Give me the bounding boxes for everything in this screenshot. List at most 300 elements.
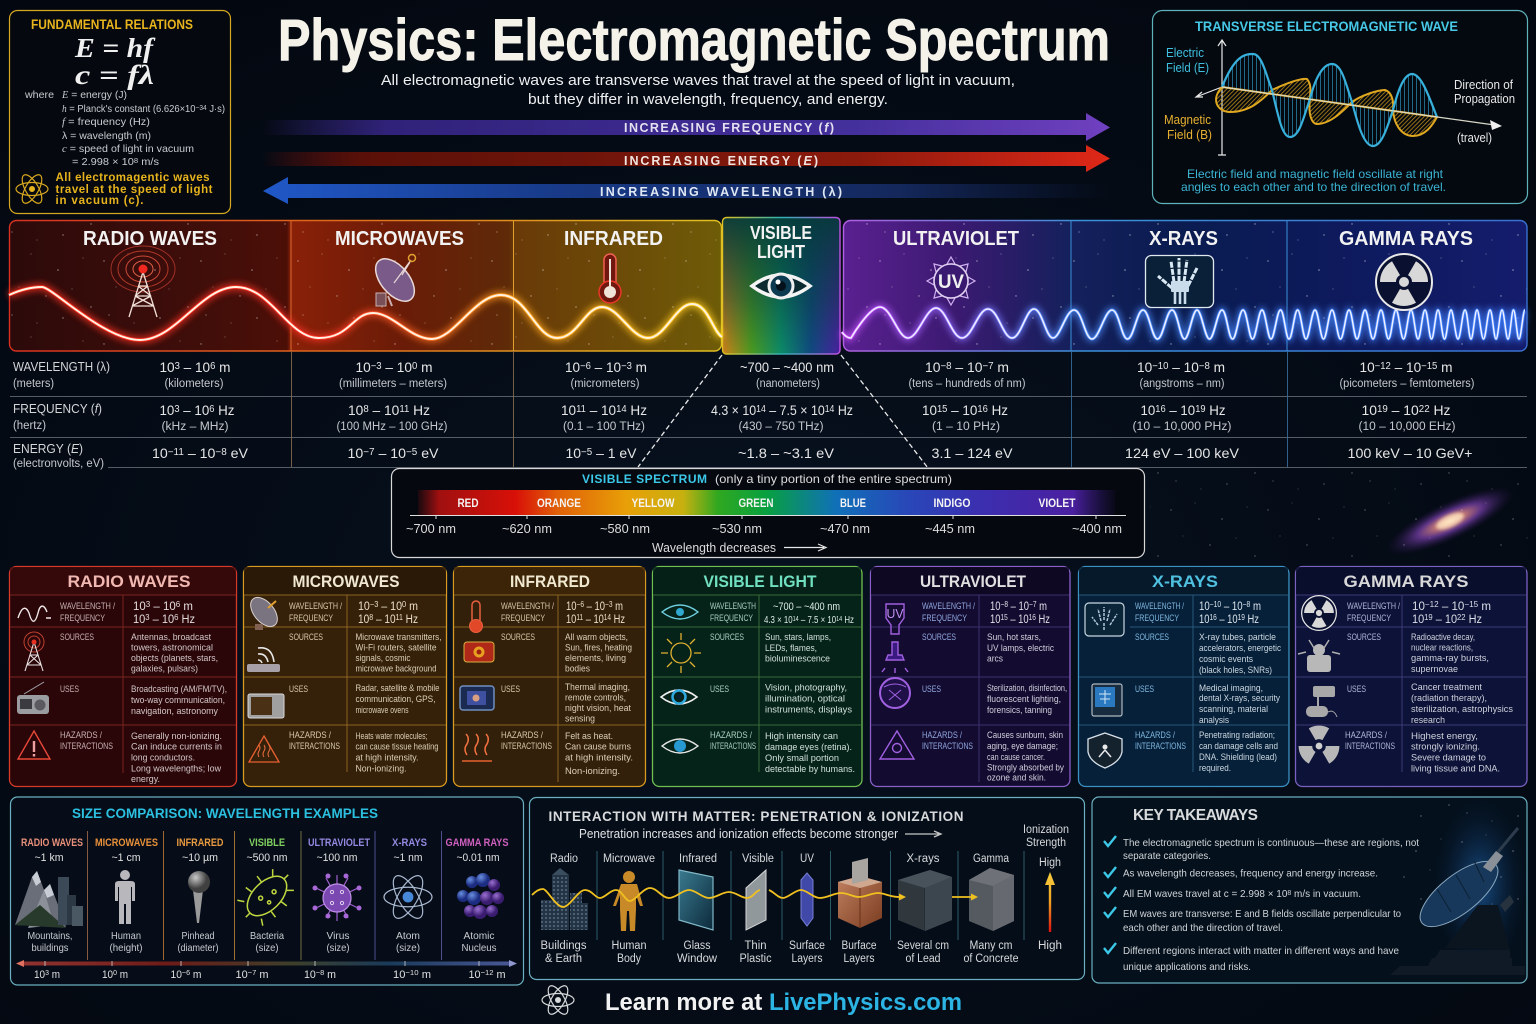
details — [987, 632, 1067, 784]
details: forensics, tanning — [987, 705, 1052, 716]
gamma values: (picometers – femtometers) — [1340, 378, 1475, 390]
x-ray values — [1125, 359, 1240, 461]
details: illumination, optical — [765, 694, 845, 704]
values: 1011 – 1014 Hz — [566, 613, 625, 626]
details: towers, astronomical — [131, 642, 213, 654]
takeaway list: All EM waves travel at c = 2.998 × 108 m/s in vacuum. — [1123, 888, 1361, 900]
details: Non-ionizing. — [356, 764, 406, 774]
card title: GAMMA RAYS — [1344, 572, 1468, 591]
details: Thermal imaging, — [565, 682, 630, 693]
details: Wi-Fi routers, satellite — [356, 642, 436, 654]
card: x-rays — [1078, 566, 1289, 786]
labels: HAZARDS / — [289, 730, 331, 740]
values: 108 – 1011 Hz — [358, 613, 418, 626]
wavelength scale: ~700 nm — [406, 522, 456, 536]
size values — [34, 852, 500, 864]
details: supernovae — [1411, 664, 1458, 675]
radio values: 103 – 106 Hz — [160, 402, 234, 418]
band headings: MICROWAVES — [335, 228, 464, 250]
card title: MICROWAVES — [292, 572, 400, 591]
microwave values: 10−3 – 100 m — [356, 359, 432, 375]
object labels: (diameter) — [178, 942, 218, 954]
labels: USES — [1347, 684, 1366, 694]
icon: x-ray hand — [1146, 256, 1214, 308]
arrow: increasing frequency — [262, 113, 1110, 141]
details: All warm objects, — [565, 632, 628, 643]
scale axis: 10−10 m — [393, 968, 431, 981]
details: Can induce currents in — [131, 742, 222, 752]
details: Medical imaging, — [1199, 683, 1263, 694]
band headings — [83, 223, 1473, 262]
details: at high intensity. — [565, 752, 633, 764]
details: objects (planets, stars, — [131, 653, 218, 664]
details: scanning, material — [1199, 704, 1268, 715]
icon: bacteria — [231, 860, 303, 932]
material labels: Several cm — [897, 940, 949, 952]
band: visible light — [722, 218, 840, 354]
callout: speed of light: travel at the speed of light — [56, 184, 213, 196]
row labels: (electronvolts, eV) — [13, 458, 104, 470]
labels — [1345, 601, 1400, 751]
dashed zoom lines — [638, 355, 928, 468]
labels: FREQUENCY — [922, 613, 967, 623]
material labels: Human — [612, 940, 646, 952]
x-ray values: (10 – 10,000 PHz) — [1132, 421, 1232, 433]
labels: USES — [710, 684, 729, 694]
object: concrete block — [969, 868, 1014, 931]
takeaway list — [1123, 837, 1419, 973]
labels — [60, 601, 115, 751]
labels: USES — [1135, 684, 1154, 694]
object labels: (size) — [326, 942, 350, 954]
column labels: Visible — [742, 853, 774, 865]
visible values: 4.3 × 1014 – 7.5 × 1014 Hz — [711, 402, 853, 418]
card title: RADIO WAVES — [68, 572, 190, 591]
details: sensing — [565, 714, 595, 724]
column labels: Infrared — [679, 853, 717, 865]
material labels: Layers — [844, 953, 875, 965]
material labels: Buildings — [540, 940, 587, 952]
card: ultraviolet — [870, 566, 1070, 786]
material labels: Plastic — [740, 953, 772, 965]
scale axis: 10−8 m — [304, 968, 336, 981]
details: communication, GPS, — [356, 694, 436, 705]
row labels: (meters) — [13, 378, 54, 390]
details: microwave ovens — [356, 705, 409, 716]
object labels: Pinhead — [182, 930, 215, 942]
labels: FREQUENCY — [1135, 613, 1179, 623]
column headings: GAMMA RAYS — [446, 837, 508, 849]
material labels: Many cm — [970, 940, 1012, 952]
details: damage eyes (retina). — [765, 742, 852, 753]
material labels — [540, 940, 1018, 965]
takeaway list: EM waves are transverse: E and B fields oscillate perpendicular to — [1123, 908, 1401, 920]
arrow: increasing energy: INCREASING ENERGY (E) — [624, 154, 818, 168]
values: 10−6 – 10−3 m — [566, 600, 623, 613]
values: 1015 – 1016 Hz — [990, 613, 1050, 626]
labels: fields and direction: (travel) — [1457, 131, 1492, 145]
details — [356, 632, 442, 774]
radio values: (kHz – MHz) — [162, 421, 229, 433]
labels — [501, 601, 554, 751]
column headings: VISIBLE — [249, 837, 285, 849]
labels: USES — [922, 684, 941, 694]
labels: INTERACTIONS — [1135, 741, 1186, 751]
details: Non-ionizing. — [565, 766, 620, 777]
details: cosmic events — [1199, 654, 1253, 665]
colour names: INDIGO — [934, 498, 971, 510]
heading: interaction with matter: INTERACTION WITH MATTER: PENETRATION & IONIZATION — [548, 809, 964, 824]
wavelength scale: ~470 nm — [820, 522, 870, 536]
values: 1019 – 1022 Hz — [1412, 613, 1482, 626]
variable definitions: = 2.998 × 10 8 m/s — [72, 156, 159, 168]
details: Antennas, broadcast — [131, 632, 211, 643]
labels: fields and direction: Electric — [1166, 46, 1204, 60]
microwave values: 108 – 1011 Hz — [348, 402, 430, 418]
colour names: BLUE — [840, 498, 866, 510]
size values: ~10 µm — [182, 852, 218, 864]
band headings: X-RAYS — [1149, 228, 1218, 250]
labels: USES — [60, 684, 79, 694]
wave: short wavelengths — [842, 307, 1525, 339]
column labels: Microwave — [603, 853, 655, 865]
values: 10−8 – 10−7 m — [990, 600, 1047, 613]
wave: long wavelengths — [9, 287, 722, 340]
callout: speed of light: All electromagentic waves — [56, 172, 210, 184]
labels: WAVELENGTH / — [501, 601, 554, 611]
colour names: VIOLET — [1038, 498, 1076, 510]
values: 10−10 – 10−8 m — [1199, 600, 1261, 613]
material labels: Thin — [744, 940, 766, 952]
heading: visible spectrum: VISIBLE SPECTRUM — [582, 472, 707, 486]
scale axis: 10−7 m — [236, 968, 268, 981]
radio values: (kilometers) — [164, 378, 224, 390]
card: gamma rays — [1296, 566, 1527, 786]
wavelength scale: ~580 nm — [600, 522, 650, 536]
wavelength scale: ~620 nm — [502, 522, 552, 536]
material labels: Burface — [842, 940, 876, 952]
labels: WAVELENGTH / — [289, 601, 342, 611]
panel: size comparison — [10, 797, 524, 985]
labels: WAVELENGTH / — [1347, 601, 1400, 611]
object labels: Atom — [396, 930, 420, 942]
wavelength scale: ~400 nm — [1072, 522, 1122, 536]
details: Heats water molecules; — [356, 731, 428, 742]
icons — [460, 601, 494, 761]
icon: atom size — [384, 871, 432, 923]
material labels: Body — [617, 953, 641, 965]
icon: UV sun — [927, 257, 975, 305]
details: elements, living — [565, 653, 626, 664]
details: Strongly absorbed by — [987, 762, 1064, 774]
object: buildings — [541, 868, 588, 930]
radio values: 103 – 106 m — [160, 359, 230, 375]
values: 103 – 106 Hz — [133, 613, 195, 626]
details: instruments, displays — [765, 704, 852, 716]
details: Long wavelengths; low — [131, 764, 221, 774]
values — [133, 600, 195, 626]
details: bioluminescence — [765, 654, 830, 664]
subtitle: but they differ in wavelength, frequency, and energy. — [528, 91, 888, 108]
radio values — [152, 359, 249, 461]
galaxy — [1150, 470, 1536, 568]
details — [1199, 632, 1281, 774]
equations: c = fλ — [75, 60, 154, 90]
details: signals, cosmic — [356, 653, 411, 664]
details — [765, 632, 855, 775]
labels: SOURCES — [60, 632, 94, 642]
material labels: Layers — [792, 953, 823, 965]
arrow: increasing wavelength — [263, 177, 1110, 204]
band headings: INFRARED — [564, 228, 663, 250]
details: Sun, stars, lamps, — [765, 632, 831, 643]
values: 10−3 – 100 m — [358, 600, 418, 613]
labels: SOURCES — [501, 632, 535, 642]
variable definitions: where — [24, 89, 54, 101]
size values: ~1 km — [34, 852, 64, 864]
labels: FREQUENCY — [710, 613, 753, 623]
details: DNA. Shielding (lead) — [1199, 752, 1277, 763]
icons — [1296, 596, 1342, 765]
material labels: of Concrete — [964, 953, 1018, 965]
size values: ~1 nm — [394, 852, 422, 864]
labels: SOURCES — [922, 632, 956, 642]
column headings: X-RAYS — [392, 837, 427, 849]
column headings: RADIO WAVES — [21, 837, 83, 849]
object labels: Virus — [326, 930, 350, 942]
values — [358, 600, 418, 626]
material labels: Glass — [684, 940, 711, 952]
labels: INTERACTIONS — [922, 741, 973, 751]
details: Broadcasting (AM/FM/TV), — [131, 684, 227, 695]
card: infrared — [454, 566, 646, 786]
panel: interaction with matter — [530, 798, 1084, 980]
subheading with arrow: Penetration increases and ionization effects become stronger — [579, 827, 898, 841]
details: arcs — [987, 654, 1003, 664]
arrow: increasing wavelength: INCREASING WAVELENGTH (λ) — [600, 185, 842, 199]
gamma values: 100 keV – 10 GeV+ — [1348, 445, 1472, 461]
infrared values — [561, 359, 647, 461]
ionization strength indicator: High — [1038, 940, 1062, 952]
diagram: E and B fields — [1196, 40, 1502, 155]
labels: HAZARDS / — [1135, 730, 1175, 740]
material labels: Window — [677, 953, 718, 965]
icons: UV — [886, 606, 904, 621]
arrow: increasing energy — [262, 145, 1110, 172]
labels: FREQUENCY — [501, 613, 545, 623]
labels: fields and direction — [1164, 46, 1515, 145]
object: surface crystal — [801, 873, 813, 926]
values — [764, 601, 854, 626]
colour names: ORANGE — [537, 498, 581, 510]
panel: visible spectrum — [392, 468, 1144, 558]
values: 1016 – 1019 Hz — [1199, 613, 1259, 626]
wavelength decreases note: Wavelength decreases — [652, 541, 776, 555]
equations — [74, 33, 156, 90]
icon: virus — [312, 874, 362, 921]
takeaway list: unique applications and risks. — [1123, 961, 1251, 973]
details: Causes sunburn, skin — [987, 730, 1063, 741]
labels — [1135, 601, 1186, 751]
details: Generally non-ionizing. — [131, 731, 222, 742]
details: Sun, fires, heating — [565, 642, 632, 654]
details: accelerators, energetic — [1199, 643, 1281, 654]
band headings: GAMMA RAYS — [1339, 228, 1473, 250]
ionization strength indicator: Strength — [1026, 837, 1066, 849]
panel: key takeaways — [1092, 797, 1527, 983]
details: Vision, photography, — [765, 682, 847, 694]
icon: mountains and buildings — [15, 871, 83, 928]
values — [990, 600, 1050, 626]
column headings — [21, 837, 508, 849]
variable definitions: f = frequency (Hz) — [62, 116, 150, 128]
labels: fields and direction: Field (E) — [1166, 61, 1209, 75]
infrared values: 10−5 – 1 eV — [566, 445, 637, 461]
gamma values: 1019 – 1022 Hz — [1362, 402, 1450, 418]
details — [1411, 632, 1513, 774]
variable definitions: E = energy (J) — [61, 89, 127, 101]
object labels: (size) — [256, 942, 278, 954]
details: High intensity can — [765, 731, 838, 742]
labels: SOURCES — [289, 632, 323, 642]
scale axis: 103 m — [34, 968, 60, 981]
footer link text: Learn more at LivePhysics.com — [605, 989, 962, 1016]
details: microwave background — [356, 664, 436, 674]
labels: USES — [501, 684, 520, 694]
object labels: Human — [111, 930, 141, 942]
x-ray values: 1016 – 1019 Hz — [1140, 402, 1226, 418]
radio values: 10−11 – 10−8 eV — [152, 445, 249, 461]
infrared values: 1011 – 1014 Hz — [561, 402, 647, 418]
card title: X-RAYS — [1152, 572, 1218, 591]
colour names: GREEN — [738, 498, 774, 510]
wavelength scale: ~530 nm — [712, 522, 762, 536]
band: radio to infrared — [10, 220, 722, 351]
variable definitions: c = speed of light in vacuum — [62, 143, 194, 155]
takeaway list: As wavelength decreases, frequency and energy increase. — [1123, 868, 1378, 880]
icons — [245, 593, 284, 762]
details: sterilization, astrophysics — [1411, 704, 1513, 715]
details: remote controls, — [565, 692, 626, 704]
size values: ~500 nm — [246, 852, 288, 864]
colour names — [458, 498, 1076, 510]
ionization strength indicator: High — [1039, 857, 1061, 869]
size values: ~0.01 nm — [456, 852, 500, 864]
band headings: RADIO WAVES — [83, 228, 217, 250]
values: 103 – 106 m — [133, 600, 193, 613]
column headings: MICROWAVES — [95, 837, 158, 849]
infrared values: (0.1 – 100 THz) — [563, 421, 645, 433]
details: Cancer treatment — [1411, 682, 1482, 693]
wave through materials — [532, 888, 978, 907]
colour names: YELLOW — [632, 498, 675, 510]
labels: HAZARDS / — [922, 730, 962, 740]
heading: transverse wave: TRANSVERSE ELECTROMAGNETIC WAVE — [1195, 18, 1458, 34]
ultraviolet values: 3.1 – 124 eV — [932, 445, 1013, 461]
row labels: (hertz) — [13, 420, 46, 432]
visible values: ~700 – ~400 nm — [740, 359, 834, 375]
labels: fields and direction: Propagation — [1454, 92, 1515, 106]
details: living tissue and DNA. — [1411, 764, 1500, 774]
details: navigation, astronomy — [131, 706, 218, 717]
icon: nucleus — [457, 873, 504, 919]
details: research — [1411, 715, 1445, 726]
object: glass window — [679, 870, 713, 930]
details: X-ray tubes, particle — [1199, 632, 1276, 643]
deep-space backdrop with dish — [1390, 799, 1526, 975]
values — [1412, 600, 1491, 626]
visible values — [711, 359, 853, 461]
details: two-way communication, — [131, 695, 225, 706]
object: human body — [613, 871, 643, 931]
values: ~700 – ~400 nm — [773, 601, 840, 613]
material labels: of Lead — [906, 953, 940, 965]
variable definitions — [24, 89, 225, 168]
details: at high intensity. — [356, 752, 418, 764]
microwave values: (millimeters – meters) — [339, 378, 447, 390]
details: gamma-ray bursts, — [1411, 653, 1489, 664]
gamma values: (10 – 10,000 EHz) — [1358, 421, 1456, 433]
details: energy. — [131, 774, 160, 785]
wavelength scale — [406, 515, 1126, 536]
details: galaxies, pulsars) — [131, 664, 198, 674]
callout: speed of light — [56, 172, 213, 207]
column headings: INFRARED — [176, 837, 224, 849]
card title: ULTRAVIOLET — [920, 572, 1027, 591]
icons — [17, 606, 51, 759]
icon: thermometer — [599, 254, 621, 303]
row labels — [13, 360, 110, 470]
values — [1199, 600, 1261, 626]
scale axis: 10−6 m — [170, 968, 202, 981]
card: radio waves — [10, 566, 236, 786]
ultraviolet values: 1015 – 1016 Hz — [922, 402, 1008, 418]
details: can damage cells and — [1199, 741, 1278, 752]
icons — [880, 604, 914, 759]
values: 4.3 × 1014 – 7.5 × 1014 Hz — [764, 615, 854, 626]
heading: size comparison: SIZE COMPARISON: WAVELENGTH EXAMPLES — [72, 806, 378, 821]
icons — [661, 605, 701, 753]
scale axis: 10−12 m — [468, 968, 506, 981]
details: Only small portion — [765, 753, 839, 764]
object: thin plastic — [746, 870, 766, 930]
heading: key takeaways: KEY TAKEAWAYS — [1133, 807, 1258, 824]
x-ray values: 10−10 – 10−8 m — [1137, 359, 1225, 375]
card: microwaves — [244, 566, 446, 786]
details: Radar, satellite & mobile — [356, 683, 440, 694]
column labels: Radio — [550, 853, 578, 865]
labels: WAVELENGTH — [710, 601, 756, 611]
object labels: (height) — [110, 942, 142, 954]
row labels: WAVELENGTH (λ) — [13, 360, 110, 374]
row labels: FREQUENCY (f) — [13, 402, 102, 416]
details: nuclear reactions, — [1411, 642, 1473, 654]
labels — [922, 601, 975, 751]
labels — [289, 601, 342, 751]
details: can cause cancer. — [987, 752, 1045, 763]
ultraviolet values: (tens – hundreds of nm) — [908, 378, 1026, 390]
icon: eye — [752, 274, 810, 298]
object labels: Mountains, — [28, 930, 72, 942]
labels: fields and direction: Direction of — [1454, 78, 1513, 92]
details: Radioactive decay, — [1411, 632, 1475, 643]
infrared values: 10−6 – 10−3 m — [565, 359, 647, 375]
caption — [1181, 167, 1446, 194]
icon: radio tower — [111, 246, 175, 317]
object labels — [28, 930, 496, 954]
scale axis — [16, 960, 517, 981]
equations: E = hf — [74, 33, 156, 63]
